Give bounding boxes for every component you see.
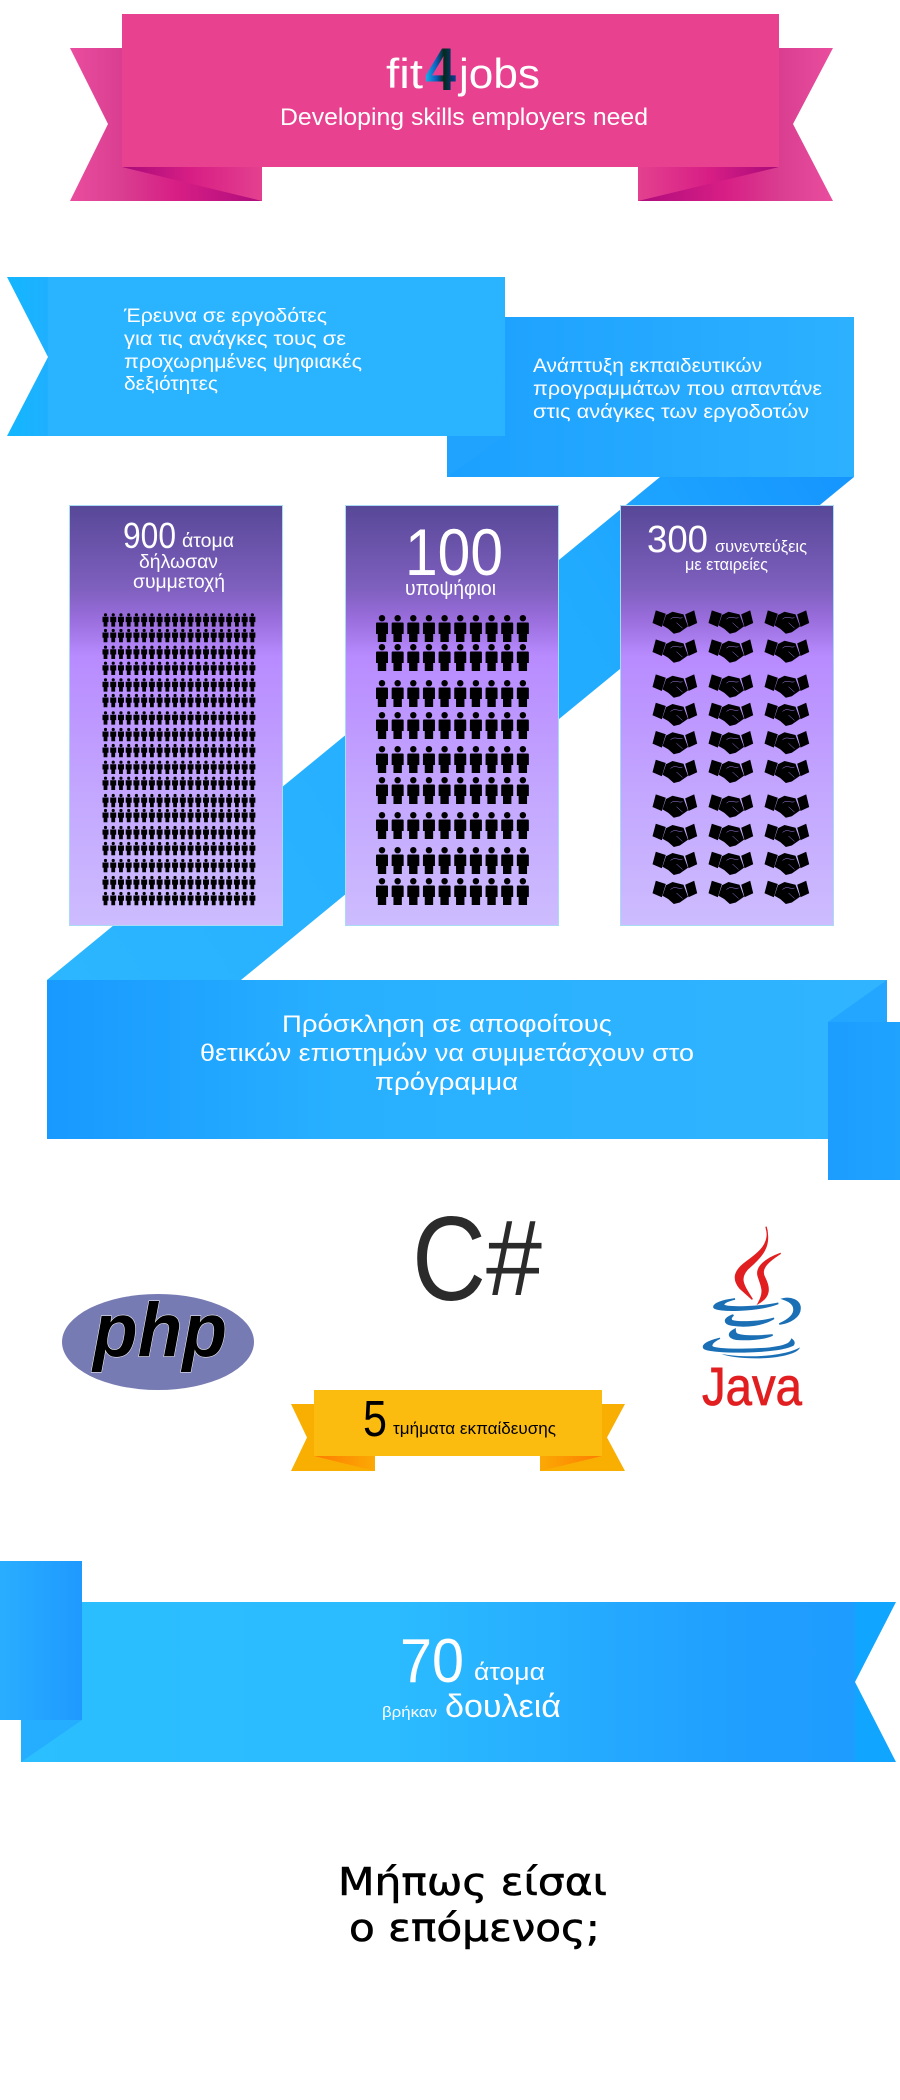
panel background bbox=[346, 506, 558, 926]
logo text fit4jobs: fit bbox=[386, 50, 423, 97]
logo text fit4jobs: jobs bbox=[457, 50, 540, 97]
banner body bbox=[447, 317, 854, 477]
banner fold bbox=[828, 980, 887, 1022]
ribbon right tail bbox=[638, 48, 833, 201]
icon: C# logo: # bbox=[486, 1197, 542, 1318]
ribbon left fold bbox=[314, 1456, 375, 1471]
banner: employer research bbox=[7, 277, 505, 436]
banner text bbox=[123, 306, 362, 395]
ribbon left tail bbox=[291, 1404, 375, 1471]
panel background bbox=[70, 506, 282, 926]
panel heading: 300 bbox=[647, 519, 708, 561]
icon: C# logo bbox=[412, 1192, 542, 1326]
banner text bbox=[200, 1011, 694, 1096]
icon: PHP logo: php bbox=[91, 1288, 227, 1373]
logo text fit4jobs bbox=[386, 36, 540, 103]
banner text: άτομα bbox=[474, 1659, 545, 1686]
ribbon right tail bbox=[540, 1404, 625, 1471]
logo text fit4jobs: 4 bbox=[425, 36, 457, 103]
banner text: δεξιότητες bbox=[124, 374, 218, 395]
panel heading: δήλωσαν bbox=[139, 552, 218, 573]
panel background bbox=[620, 506, 834, 926]
ribbon main panel bbox=[314, 1390, 602, 1456]
header ribbon: fit4jobs bbox=[70, 14, 833, 201]
banner: program development bbox=[447, 317, 854, 477]
ribbon text bbox=[363, 1390, 556, 1447]
ribbon main panel bbox=[122, 14, 779, 167]
icon: C# logo: C bbox=[412, 1192, 486, 1326]
panel heading: 900 bbox=[123, 515, 176, 556]
banner: invitation to graduates bbox=[47, 980, 900, 1180]
banner: 70 people found work bbox=[0, 1561, 896, 1762]
closing question: ο επόμενος; bbox=[349, 1906, 600, 1950]
icons: people grid large bbox=[376, 615, 529, 905]
panel: 100 candidates bbox=[346, 506, 558, 926]
panel heading: 100 bbox=[405, 515, 503, 589]
banner body bbox=[21, 1602, 855, 1762]
banner text: προγραμμάτων που απαντάνε bbox=[533, 379, 823, 400]
banner tail bbox=[7, 277, 48, 436]
banner text: 70 bbox=[400, 1627, 464, 1696]
banner fold bbox=[447, 436, 505, 477]
banner body bbox=[48, 277, 505, 436]
icon: Java logo: Java bbox=[702, 1357, 803, 1417]
icons: people grid small bbox=[102, 613, 255, 905]
panel heading: υποψήφιοι bbox=[405, 578, 496, 600]
banner text: για τις ανάγκες τους σε bbox=[124, 329, 347, 350]
panel heading bbox=[123, 515, 234, 593]
banner text: προχωρημένες ψηφιακές bbox=[124, 352, 362, 373]
panel heading: συμμετοχή bbox=[133, 572, 225, 593]
panel heading: με εταιρείες bbox=[685, 555, 768, 574]
icon: PHP logo bbox=[62, 1288, 254, 1390]
ribbon left tail bbox=[70, 48, 262, 201]
banner fold bbox=[21, 1720, 82, 1762]
icon: Java logo bbox=[702, 1227, 803, 1417]
banner text: Ανάπτυξη εκπαιδευτικών bbox=[533, 356, 762, 377]
banner text: θετικών επιστημών να συμμετάσχουν στο bbox=[200, 1040, 694, 1067]
banner text bbox=[382, 1627, 561, 1724]
ribbon left fold bbox=[122, 167, 262, 201]
banner text: πρόγραμμα bbox=[375, 1069, 518, 1096]
banner flap bbox=[828, 1022, 900, 1180]
banner flap bbox=[0, 1561, 82, 1720]
ribbon right fold bbox=[638, 167, 779, 201]
icons: handshake grid bbox=[652, 610, 809, 904]
closing question bbox=[338, 1860, 607, 1950]
panel heading: συνεντεύξεις bbox=[715, 537, 807, 556]
ribbon text: τμήματα εκπαίδευσης bbox=[393, 1419, 556, 1438]
diagonal ribbon band bbox=[47, 477, 854, 980]
banner text: βρήκαν bbox=[382, 1704, 437, 1721]
banner text bbox=[533, 356, 823, 423]
ribbon: 5 training tracks bbox=[291, 1390, 625, 1471]
banner text: δουλειά bbox=[445, 1688, 561, 1724]
banner body bbox=[47, 980, 887, 1139]
banner tail bbox=[855, 1602, 896, 1762]
ribbon right fold bbox=[540, 1456, 602, 1471]
panel: 900 applicants bbox=[70, 506, 282, 926]
banner text: στις ανάγκες των εργοδοτών bbox=[533, 402, 809, 423]
tagline: Developing skills employers need bbox=[280, 104, 648, 131]
ribbon text: 5 bbox=[363, 1390, 387, 1447]
panel: 300 interviews bbox=[620, 506, 834, 926]
panel heading bbox=[647, 519, 807, 574]
closing question: Μήπως είσαι bbox=[338, 1860, 607, 1904]
panel heading: άτομα bbox=[182, 531, 234, 552]
banner text: Έρευνα σε εργοδότες bbox=[123, 306, 327, 327]
banner text: Πρόσκληση σε αποφοίτους bbox=[282, 1011, 612, 1038]
